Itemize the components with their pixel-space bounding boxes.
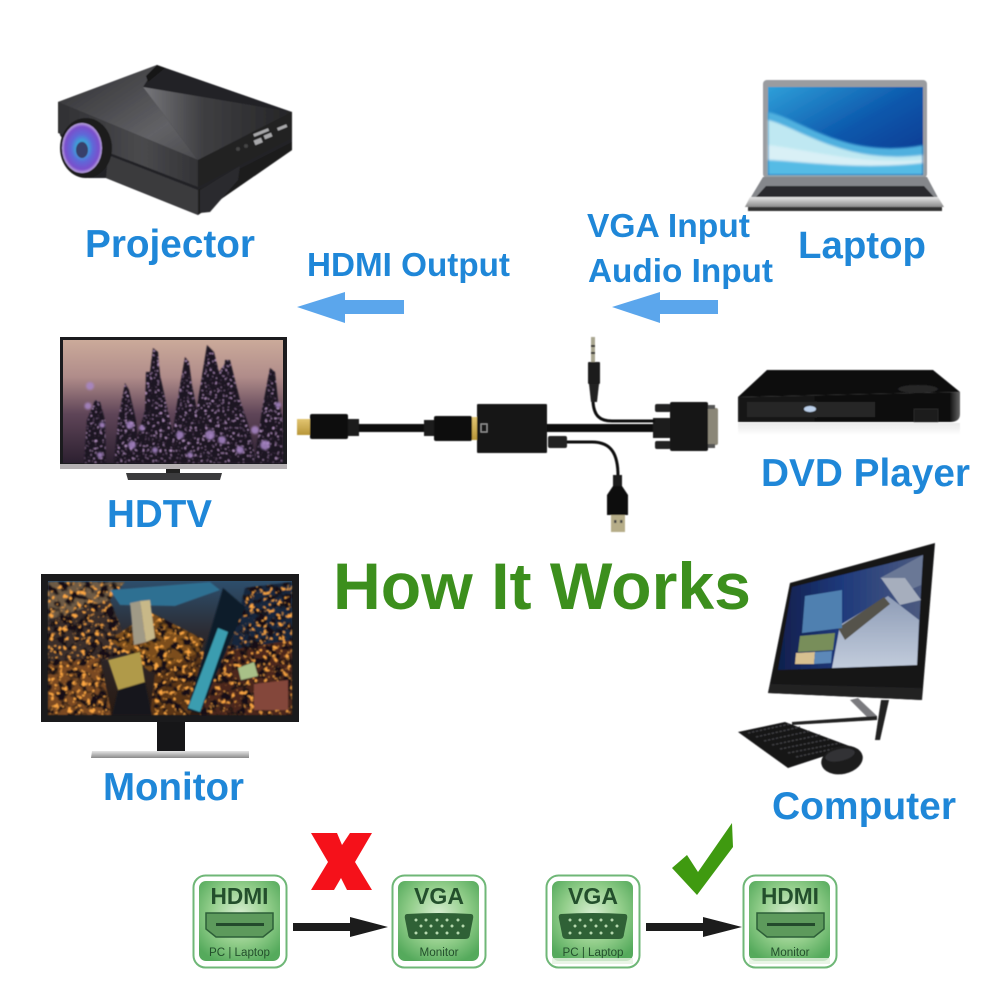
icon: HDMI Monitor: HDMI	[761, 883, 819, 909]
HDMI cable	[359, 424, 425, 432]
TV screen	[63, 340, 283, 463]
label: Computer: Computer	[772, 785, 956, 828]
keyboard	[738, 722, 852, 768]
icon: monitor	[41, 574, 299, 758]
computer screen	[778, 555, 923, 670]
icon: VGA PC Laptop: VGA	[568, 883, 618, 909]
icon: VGA Monitor: Monitor	[420, 947, 459, 959]
icon: DVD player	[738, 370, 960, 435]
icon: VGA PC Laptop: PC | Laptop	[562, 947, 624, 959]
icon: VGA Monitor: VGA	[414, 883, 464, 909]
audio jack	[588, 337, 600, 402]
icon: HDMI PC Laptop: PC | Laptop	[209, 947, 270, 959]
arrow: HDMI output direction	[297, 292, 404, 323]
icon: laptop	[745, 80, 944, 211]
icon: projector	[58, 65, 292, 215]
arrow: VGA and audio input direction	[612, 292, 718, 323]
VGA plug	[653, 402, 718, 451]
adapter box	[477, 404, 547, 453]
VGA cable	[547, 424, 655, 432]
HDMI plug: at adapter	[424, 416, 477, 441]
icon: HDMI PC Laptop: HDMI	[210, 883, 268, 909]
icon: HDMI Monitor: Monitor	[770, 947, 810, 959]
icon: red cross	[311, 833, 372, 890]
label: DVD Player: DVD Player	[761, 452, 970, 495]
computer stand	[792, 698, 889, 740]
label: Monitor: Monitor	[103, 766, 244, 809]
monitor stand neck	[157, 722, 185, 751]
USB plug	[607, 475, 628, 532]
audio cable	[593, 402, 655, 421]
mouse	[819, 742, 865, 778]
monitor screen	[48, 581, 292, 715]
projector lens	[60, 118, 112, 178]
label: Audio Input: Audio Input	[588, 253, 773, 290]
projector ports	[236, 124, 287, 151]
arrow: VGA to HDMI	[646, 917, 742, 937]
icon: VGA Monitor	[392, 876, 486, 968]
label: Projector: Projector	[85, 223, 255, 266]
icon: HDMI Monitor	[744, 876, 836, 968]
USB cable	[567, 442, 618, 476]
icon: HDMI PC Laptop	[194, 876, 286, 968]
label: Laptop: Laptop	[798, 224, 926, 267]
icon: VGA PC Laptop	[546, 876, 640, 968]
label: HDTV: HDTV	[107, 493, 212, 536]
label: VGA Input: VGA Input	[587, 208, 750, 245]
monitor stand base	[91, 751, 249, 758]
icon: HDTV	[60, 337, 287, 480]
icon: green check mark	[672, 823, 733, 895]
arrow: HDMI to VGA	[293, 917, 388, 937]
heading: How It Works: How It Works	[333, 549, 751, 623]
HDMI to VGA adapter cable	[297, 337, 718, 532]
icon: all-in-one computer	[738, 543, 935, 778]
label: HDMI Output: HDMI Output	[307, 247, 510, 284]
laptop screen	[768, 87, 923, 175]
HDMI plug: left	[297, 414, 359, 439]
